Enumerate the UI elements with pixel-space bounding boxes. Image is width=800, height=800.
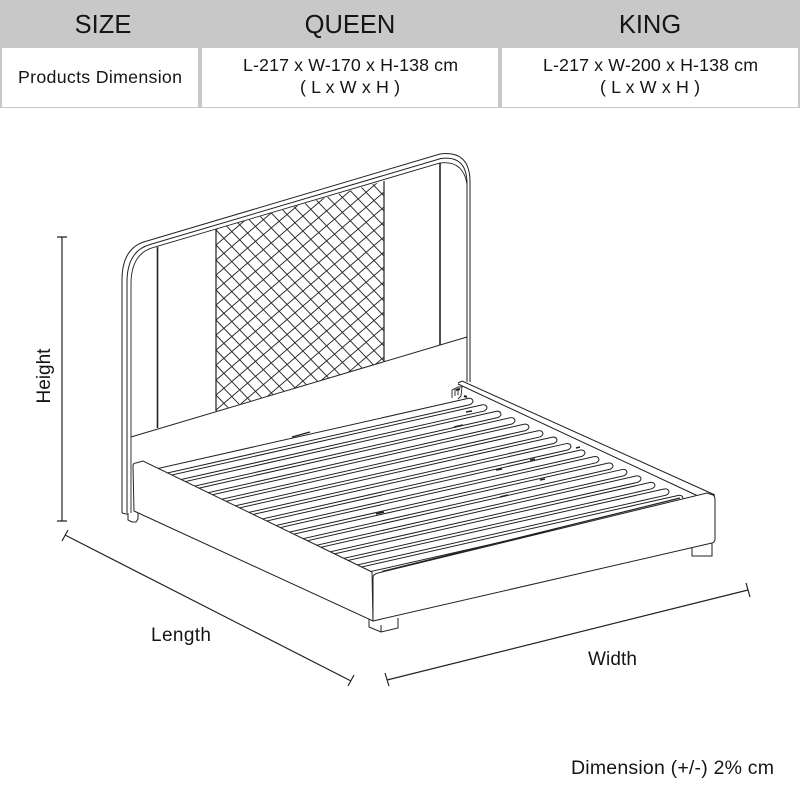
slats <box>158 398 684 572</box>
queen dimensions: L-217 x W-170 x H-138 cm <box>243 55 458 75</box>
side rail <box>133 461 373 621</box>
front rail <box>373 493 715 621</box>
size table <box>0 0 800 108</box>
bracket <box>452 387 467 399</box>
king dimension key: ( L x W x H ) <box>600 77 700 97</box>
queen dimension key: ( L x W x H ) <box>300 77 400 97</box>
cell: king <box>502 48 798 107</box>
width label: Width <box>588 649 637 670</box>
right rail <box>458 381 715 496</box>
cell: queen <box>202 48 498 107</box>
row label: Products Dimension <box>18 67 182 87</box>
width line <box>385 583 750 686</box>
height line <box>57 237 67 521</box>
slat fittings <box>292 411 580 514</box>
front rail top double line <box>382 498 680 572</box>
heading: king: KING <box>619 11 681 39</box>
height label: Height <box>34 348 55 403</box>
heading: size: SIZE <box>75 11 131 39</box>
bed illustration <box>122 153 716 632</box>
heading: queen: QUEEN <box>305 11 395 39</box>
king dimensions: L-217 x W-200 x H-138 cm <box>543 55 758 75</box>
table header background <box>0 0 800 48</box>
headboard frame <box>122 154 470 515</box>
length line <box>62 530 354 686</box>
tolerance note: Dimension (+/-) 2% cm <box>571 757 774 779</box>
cell: products dimension <box>2 48 198 107</box>
dimension: width <box>385 583 750 686</box>
headboard dividers <box>131 163 467 437</box>
dimension: length <box>62 530 354 686</box>
length label: Length <box>151 625 211 646</box>
lattice panel <box>215 181 385 411</box>
legs <box>128 513 712 632</box>
dimension: height <box>34 237 67 521</box>
table body background <box>0 48 800 108</box>
